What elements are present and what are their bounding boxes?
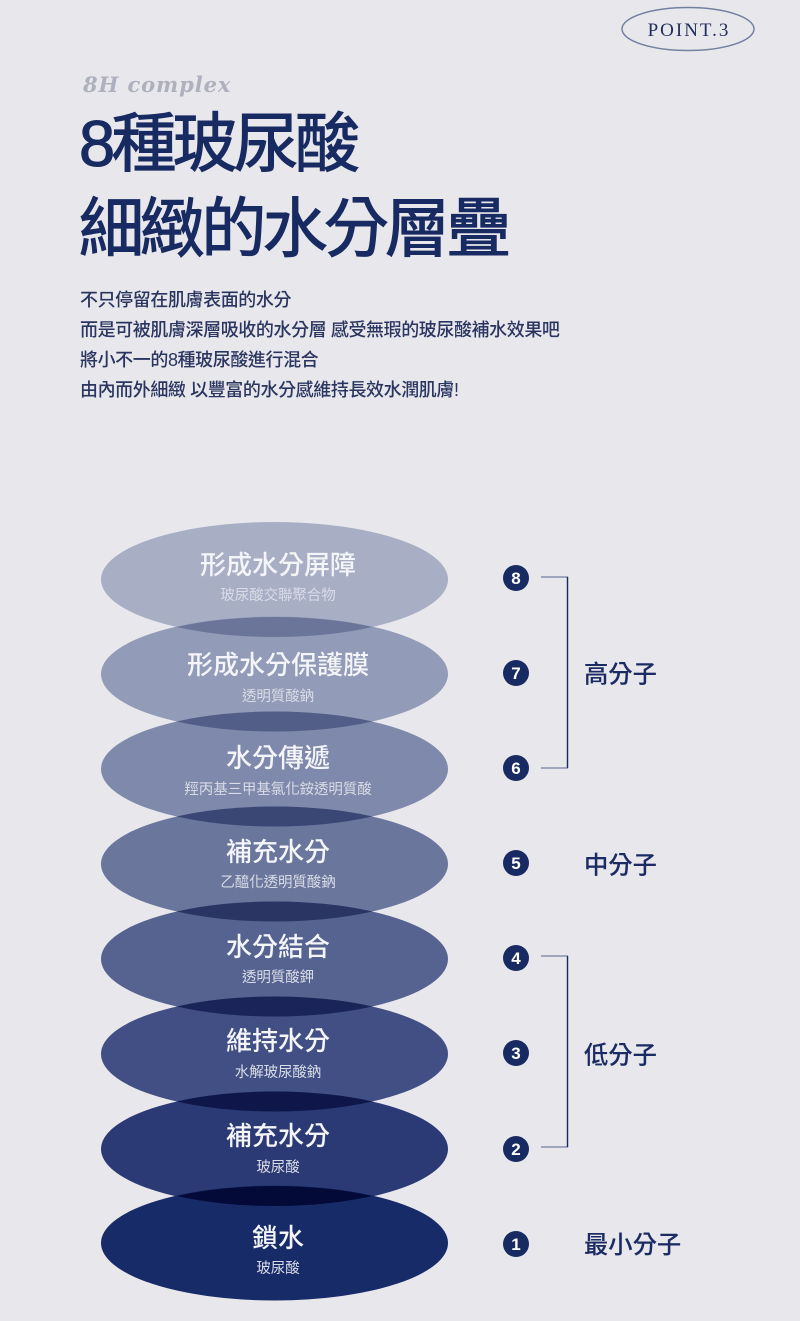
- eyebrow: 8H complex: 8H complex: [82, 72, 231, 97]
- intro text block: 而是可被肌膚深層吸收的水分層 感受無瑕的玻尿酸補水效果吧: [80, 319, 560, 340]
- number badges: 2: [511, 1140, 521, 1159]
- layer 5: 補充水分: [101, 806, 448, 922]
- label: 中分子: 中分子: [584, 852, 657, 880]
- labels: layer 2: 補充水分: [226, 1121, 330, 1151]
- labels: layer 2: [226, 1121, 330, 1176]
- badge: POINT.3: [622, 8, 754, 50]
- number badges: 4: [511, 949, 521, 968]
- number badges: [503, 565, 529, 1257]
- labels: layer 4: 透明質酸鉀: [242, 968, 314, 986]
- bracket: high molecular: [541, 577, 568, 768]
- labels: layer 7: 透明質酸鈉: [242, 687, 314, 705]
- title: 細緻的水分層疊: [79, 192, 508, 265]
- labels: layer 1: 鎖水: [252, 1223, 304, 1253]
- layer 3: 維持水分: [101, 996, 448, 1112]
- labels: layer 7: [187, 650, 369, 705]
- number badges: 5: [511, 854, 521, 873]
- labels: layer 8: 玻尿酸交聯聚合物: [220, 586, 336, 604]
- labels: layer 3: [226, 1026, 330, 1081]
- number badges: 3: [511, 1044, 521, 1063]
- labels: layer 1: [252, 1223, 304, 1277]
- labels: layer 3: 水解玻尿酸鈉: [235, 1064, 321, 1081]
- labels: layer 6: [184, 743, 372, 798]
- layer 4: 水分結合: [101, 902, 448, 1016]
- labels: layer 2: 玻尿酸: [256, 1159, 300, 1176]
- layer 7: 形成水分保護膜: [101, 616, 448, 732]
- labels: layer 7: 形成水分保護膜: [187, 650, 369, 680]
- label: 高分子: 高分子: [584, 662, 657, 688]
- intro text block: 將小不一的8種玻尿酸進行混合: [80, 350, 319, 370]
- labels: layer 1: 玻尿酸: [256, 1260, 300, 1277]
- labels: layer 5: 補充水分: [226, 837, 330, 867]
- labels: layer 6: 水分傳遞: [226, 743, 330, 773]
- labels: layer 8: 形成水分屏障: [200, 550, 356, 580]
- layer 6: 水分傳遞: [101, 712, 448, 826]
- labels: layer 5: [220, 837, 336, 891]
- layer 8: 形成水分屏障: [101, 522, 448, 637]
- layer 2: 補充水分: [101, 1092, 448, 1206]
- labels: layer 8: [200, 550, 356, 604]
- labels: layer 4: [226, 932, 330, 986]
- label: 低分子: 低分子: [584, 1042, 657, 1070]
- label: 最小分子: 最小分子: [584, 1232, 681, 1259]
- number badges: 6: [511, 759, 521, 778]
- overlaps between layers: [177, 617, 372, 1206]
- labels: layer 4: 水分結合: [226, 932, 330, 962]
- stacked ellipses chart: [101, 522, 448, 1300]
- bracket: low molecular: [541, 956, 568, 1147]
- intro text block: [80, 290, 560, 400]
- number badges: 8: [511, 569, 521, 588]
- layer 1: 鎖水: [101, 1186, 448, 1300]
- number badges: 7: [511, 664, 521, 683]
- intro text block: 不只停留在肌膚表面的水分: [80, 290, 291, 310]
- intro text block: 由內而外細緻 以豐富的水分感維持長效水潤肌膚!: [80, 379, 459, 400]
- title: 8種玻尿酸: [79, 107, 358, 180]
- number badges: 1: [511, 1235, 521, 1254]
- badge: POINT.3: POINT.3: [648, 20, 730, 41]
- labels: layer 6: 羥丙基三甲基氯化銨透明質酸: [184, 780, 372, 798]
- labels: layer 3: 維持水分: [226, 1026, 330, 1056]
- title: [79, 107, 508, 265]
- labels: layer 5: 乙醯化透明質酸鈉: [220, 873, 336, 891]
